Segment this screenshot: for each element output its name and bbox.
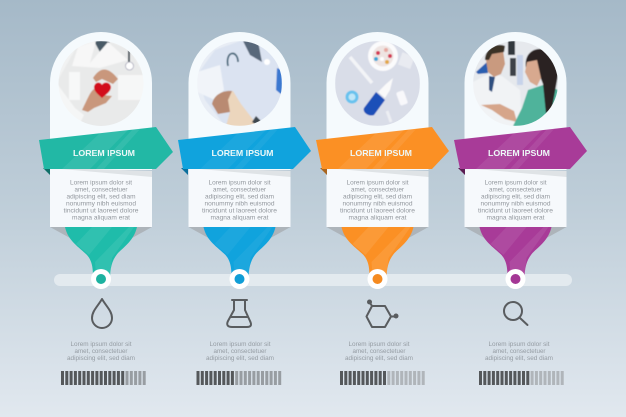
icon: molecule <box>366 300 398 327</box>
text box 4: nonummy nibh euismod <box>480 200 551 208</box>
drop shadows <box>464 227 566 238</box>
drop shadows <box>188 227 290 238</box>
ribbon 1 <box>39 127 173 175</box>
caption 4: amet, consectetuer <box>492 348 546 355</box>
card 1 <box>50 32 152 170</box>
caption 1 <box>67 341 135 362</box>
progress bar 3 <box>342 371 423 385</box>
icon: water drop <box>92 299 112 328</box>
caption 2: adipiscing elit, sed diam <box>206 355 274 362</box>
ribbon 4: LOREM IPSUM <box>488 149 550 158</box>
text box 3: magna aliquam erat <box>348 214 407 222</box>
text box 4: tincidunt ut laoreet dolore <box>478 208 553 214</box>
text box 1: adipiscing elit, sed diam <box>66 194 136 200</box>
caption 3: amet, consectetuer <box>352 348 406 355</box>
caption 4: Lorem ipsum dolor sit <box>488 341 550 348</box>
caption 4 <box>485 341 553 362</box>
text box 2: adipiscing elit, sed diam <box>205 194 274 200</box>
drop shadows <box>50 227 152 238</box>
text box 2: Lorem ipsum dolor sit <box>208 180 271 186</box>
text box 4 <box>464 168 566 238</box>
funnel 4 <box>480 227 552 280</box>
funnel 2 <box>204 227 276 280</box>
ribbon 2: LOREM IPSUM <box>212 149 274 158</box>
icon: magnifier <box>504 302 528 325</box>
caption 4: adipiscing elit, sed diam <box>485 355 553 362</box>
caption 3: Lorem ipsum dolor sit <box>348 341 410 348</box>
timeline track <box>54 274 572 286</box>
text box 3: Lorem ipsum dolor sit <box>346 180 409 186</box>
text box 2: magna aliquam erat <box>210 214 269 222</box>
text box 1: nonummy nibh euismod <box>66 200 136 208</box>
text box 1: Lorem ipsum dolor sit <box>70 180 132 186</box>
progress bar 2 <box>198 371 280 385</box>
text box 3: tincidunt ut laoreet dolore <box>340 208 415 214</box>
text box 1: tincidunt ut laoreet dolore <box>64 208 139 214</box>
timeline marker 4 <box>506 269 526 289</box>
text box 4: magna aliquam erat <box>486 214 545 222</box>
photo: doctor holding heart <box>58 41 144 127</box>
funnel 1 <box>65 227 137 280</box>
ribbon 3 <box>316 127 449 175</box>
text box 4: adipiscing elit, sed diam <box>481 194 550 200</box>
text box 3: adipiscing elit, sed diam <box>343 194 412 200</box>
icon: flask <box>227 300 251 327</box>
timeline marker 3 <box>368 269 388 289</box>
caption 3: adipiscing elit, sed diam <box>345 355 413 362</box>
caption 1: amet, consectetuer <box>74 348 128 355</box>
timeline marker 2 <box>230 269 250 289</box>
caption 1: Lorem ipsum dolor sit <box>70 341 132 348</box>
ribbon 3: LOREM IPSUM <box>350 149 412 158</box>
text box 1: amet, consectetuer <box>74 186 128 194</box>
funnel 3 <box>342 227 414 280</box>
text box 2: tincidunt ut laoreet dolore <box>202 208 277 214</box>
text box 3 <box>326 168 428 238</box>
text box 2 <box>188 168 290 238</box>
panel: step 1 <box>39 32 173 385</box>
progress bar 1 <box>62 371 144 385</box>
card 2 <box>188 32 290 170</box>
text box 4: amet, consectetuer <box>489 186 543 194</box>
caption 2: amet, consectetuer <box>214 348 267 355</box>
card 4 <box>464 32 566 170</box>
progress bar 4 <box>480 371 562 385</box>
photo: doctor and patient handshake <box>197 41 282 126</box>
panel: step 4 <box>454 32 587 385</box>
text box 1: magna aliquam erat <box>72 214 130 222</box>
caption 2 <box>206 341 274 362</box>
ribbon 1: LOREM IPSUM <box>73 149 135 158</box>
ribbon 2 <box>178 127 311 175</box>
panel: step 2 <box>178 32 311 385</box>
caption 2: Lorem ipsum dolor sit <box>210 341 271 348</box>
text box 2: nonummy nibh euismod <box>204 200 275 208</box>
text box 2: amet, consectetuer <box>213 186 267 194</box>
timeline marker 1 <box>91 269 111 289</box>
drop shadows <box>326 227 428 238</box>
ribbon 4 <box>454 127 587 175</box>
card 3 <box>326 32 428 170</box>
photo: doctor with patient <box>473 41 558 126</box>
caption 1: adipiscing elit, sed diam <box>67 355 135 362</box>
photo: medicines flat lay <box>335 41 420 126</box>
caption 3 <box>345 341 413 362</box>
text box 4: Lorem ipsum dolor sit <box>484 180 547 186</box>
text box 3: nonummy nibh euismod <box>342 200 413 208</box>
panel: step 3 <box>316 32 449 385</box>
text box 3: amet, consectetuer <box>351 186 405 194</box>
text box 1 <box>50 168 152 238</box>
